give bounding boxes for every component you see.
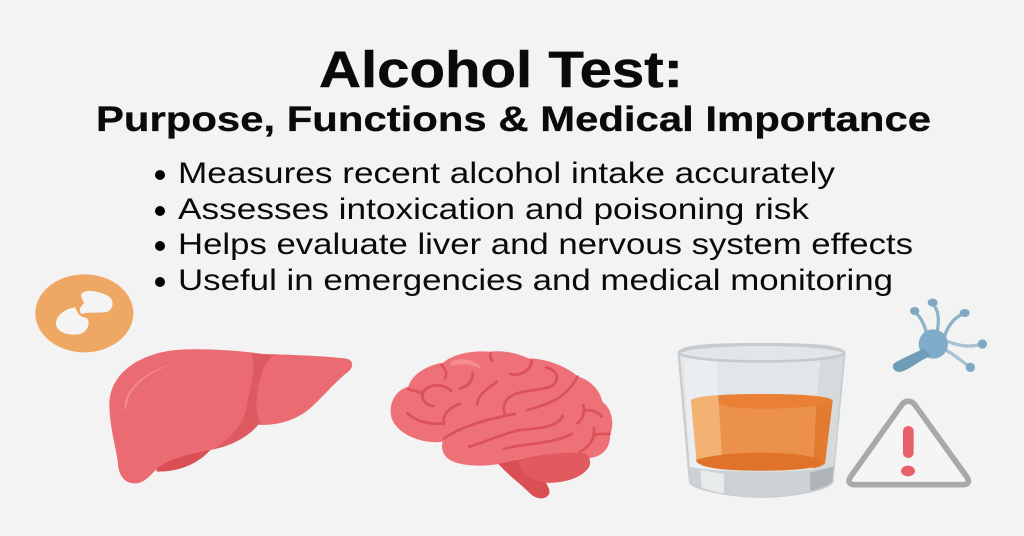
- bullet 2: Assesses intoxication and poisoning risk: [178, 193, 810, 226]
- bullet 3: Helps evaluate liver and nervous system effects: [178, 228, 913, 261]
- icon: warning triangle: [849, 401, 968, 485]
- cerebrum: [391, 351, 612, 466]
- sulci: [407, 353, 609, 452]
- bullet 1: Measures recent alcohol intake accurately: [178, 157, 835, 190]
- icon: orange circle badge: [35, 274, 133, 352]
- whisky: [691, 394, 833, 471]
- bullet list: [155, 157, 913, 297]
- glass base: [689, 467, 833, 497]
- icon: neuron: [893, 299, 987, 372]
- cerebellum: [498, 453, 590, 498]
- title: Alcohol Test:: [319, 41, 683, 98]
- icon: glass of whisky: [679, 344, 844, 497]
- glass rim: [679, 345, 844, 361]
- bullet 4: Useful in emergencies and medical monitoring: [178, 264, 893, 297]
- glass body: [679, 344, 844, 497]
- subtitle: Purpose, Functions & Medical Importance: [96, 100, 931, 139]
- icon: liver: [109, 349, 352, 483]
- icon: brain: [391, 351, 612, 498]
